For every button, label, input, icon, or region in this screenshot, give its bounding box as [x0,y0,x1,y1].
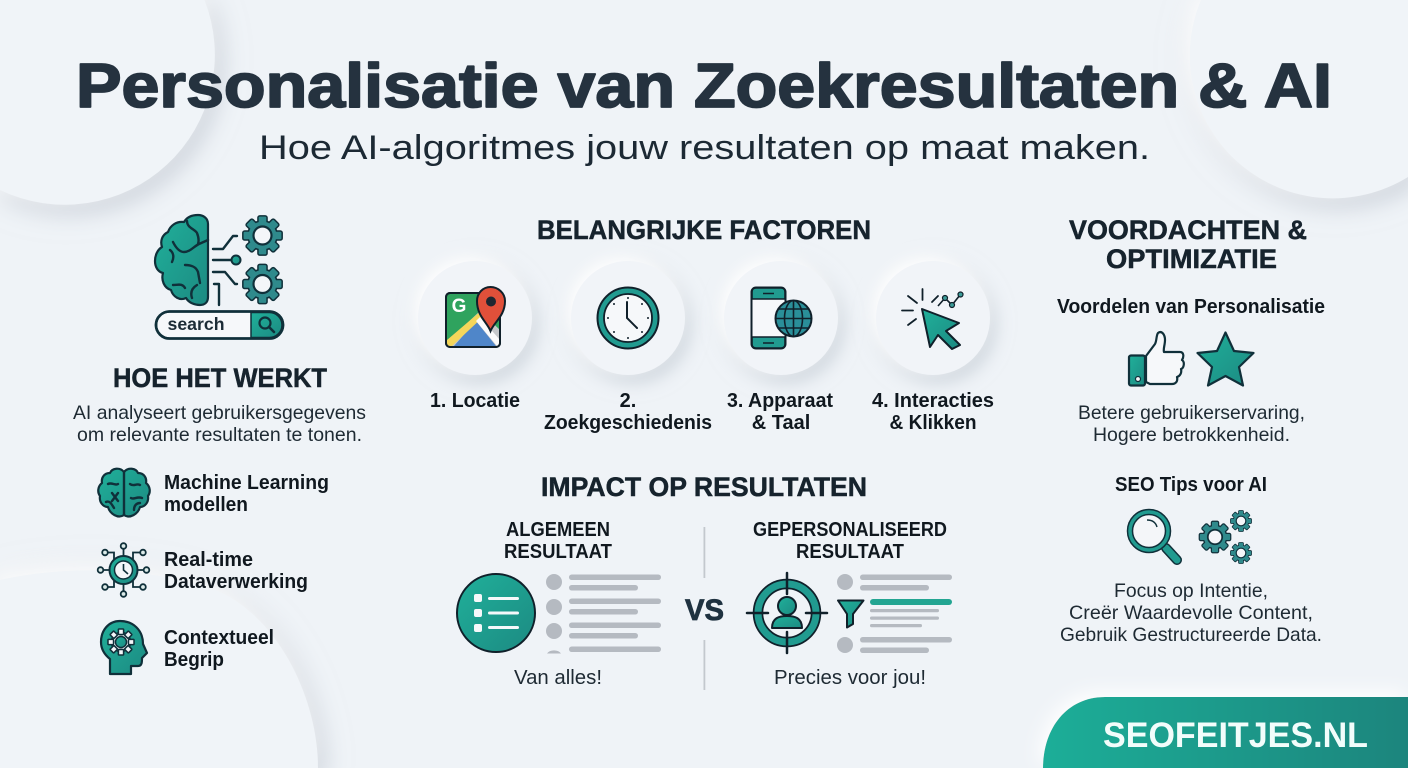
icon: star [1198,332,1254,386]
heading: impact op resultaten: IMPACT OP RESULTATEN [541,472,867,502]
label [727,390,833,434]
icon: target person [747,573,827,653]
text block: seo tips: Gebruik Gestructureerde Data. [1060,624,1322,646]
panel: hoe het werkt [73,215,366,674]
heading: RESULTAAT [796,541,904,563]
label: & Taal [752,412,810,434]
text block: seo tips: Creër Waardevolle Content, [1069,602,1313,624]
title: Personalisatie van Zoekresultaten & AI [76,52,1332,121]
text block: uitleg [73,402,366,446]
item: real-time [98,543,308,597]
label: & Klikken [890,412,976,434]
item: machine learning [98,469,329,516]
factor: locatie [418,261,532,412]
label: 4. Interacties [872,390,994,412]
caption: Van alles! [514,667,602,689]
label: Begrip [164,648,224,671]
heading [753,519,947,563]
label [164,471,329,516]
result list [837,574,952,653]
factor: interacties en klikken [872,261,994,434]
label: Dataverwerking [164,570,308,593]
label [164,626,274,671]
subheading: voordelen: Voordelen van Personalisatie [1057,296,1325,318]
panel: belangrijke factoren [418,215,994,434]
icon: phone and globe [752,288,812,348]
icon: clock [598,288,658,348]
icon: brain, gears and search bar: search [168,314,224,334]
label: Contextueel [164,626,274,649]
icon: gears [1200,511,1251,563]
column: gepersonaliseerd resultaat [747,519,952,689]
panel: voordachten en optimizatie [1057,215,1325,646]
label: 1. Locatie [430,390,520,412]
label: 3. Apparaat [727,390,833,412]
label [872,390,994,434]
label: Zoekgeschiedenis [544,412,712,434]
column: algemeen resultaat [457,519,661,689]
icon: filter [838,600,864,628]
icon: map pin: G [452,296,466,317]
heading: ALGEMEEN [506,519,610,541]
label [544,390,712,434]
icon: brain [98,469,150,516]
subtitle: Hoe AI-algoritmes jouw resultaten op maat maken. [259,129,1150,167]
text block: seo tips: Focus op Intentie, [1114,580,1268,602]
text block: voordelen: Hogere betrokkenheid. [1093,424,1290,446]
factor: zoekgeschiedenis [544,261,712,434]
icon: cursor click [902,289,963,349]
caption: Precies voor jou! [774,667,926,689]
icon: clock network [98,543,149,597]
brand badge: SEOFEITJES.NL [1103,716,1368,755]
heading [1069,215,1307,274]
text block: seo tips [1060,580,1322,646]
result list [546,574,661,654]
label: Real-time [164,548,253,571]
label: 2. [620,390,636,412]
text block: uitleg: AI analyseert gebruikersgegevens [73,402,366,424]
heading: GEPERSONALISEERD [753,519,947,541]
subheading: seo tips: SEO Tips voor AI [1115,474,1267,496]
icon: list circle [457,574,535,652]
heading [504,519,612,563]
versus divider: VS [685,594,724,627]
label: Machine Learning [164,471,329,494]
icon: thumbs up [1129,332,1184,386]
text block: voordelen: Betere gebruikerservaring, [1078,402,1305,424]
label: modellen [164,493,248,516]
brand badge [1043,697,1408,768]
text block: voordelen [1078,402,1305,446]
icon: brain, gears and search bar [155,215,283,338]
icon: map pin [446,287,505,347]
heading: hoe het werkt: HOE HET WERKT [113,363,327,393]
icon: magnifier [1130,512,1177,560]
heading: RESULTAAT [504,541,612,563]
heading: OPTIMIZATIE [1106,244,1277,274]
label [164,548,308,593]
icon: head with gear [101,621,147,674]
panel: impact op resultaten [457,472,952,690]
text block: uitleg: om relevante resultaten te tonen. [77,424,362,446]
heading: belangrijke factoren: BELANGRIJKE FACTOREN [537,215,871,245]
factor: apparaat en taal [724,261,838,434]
item: contextueel begrip [101,621,274,674]
heading: VOORDACHTEN & [1069,215,1307,245]
